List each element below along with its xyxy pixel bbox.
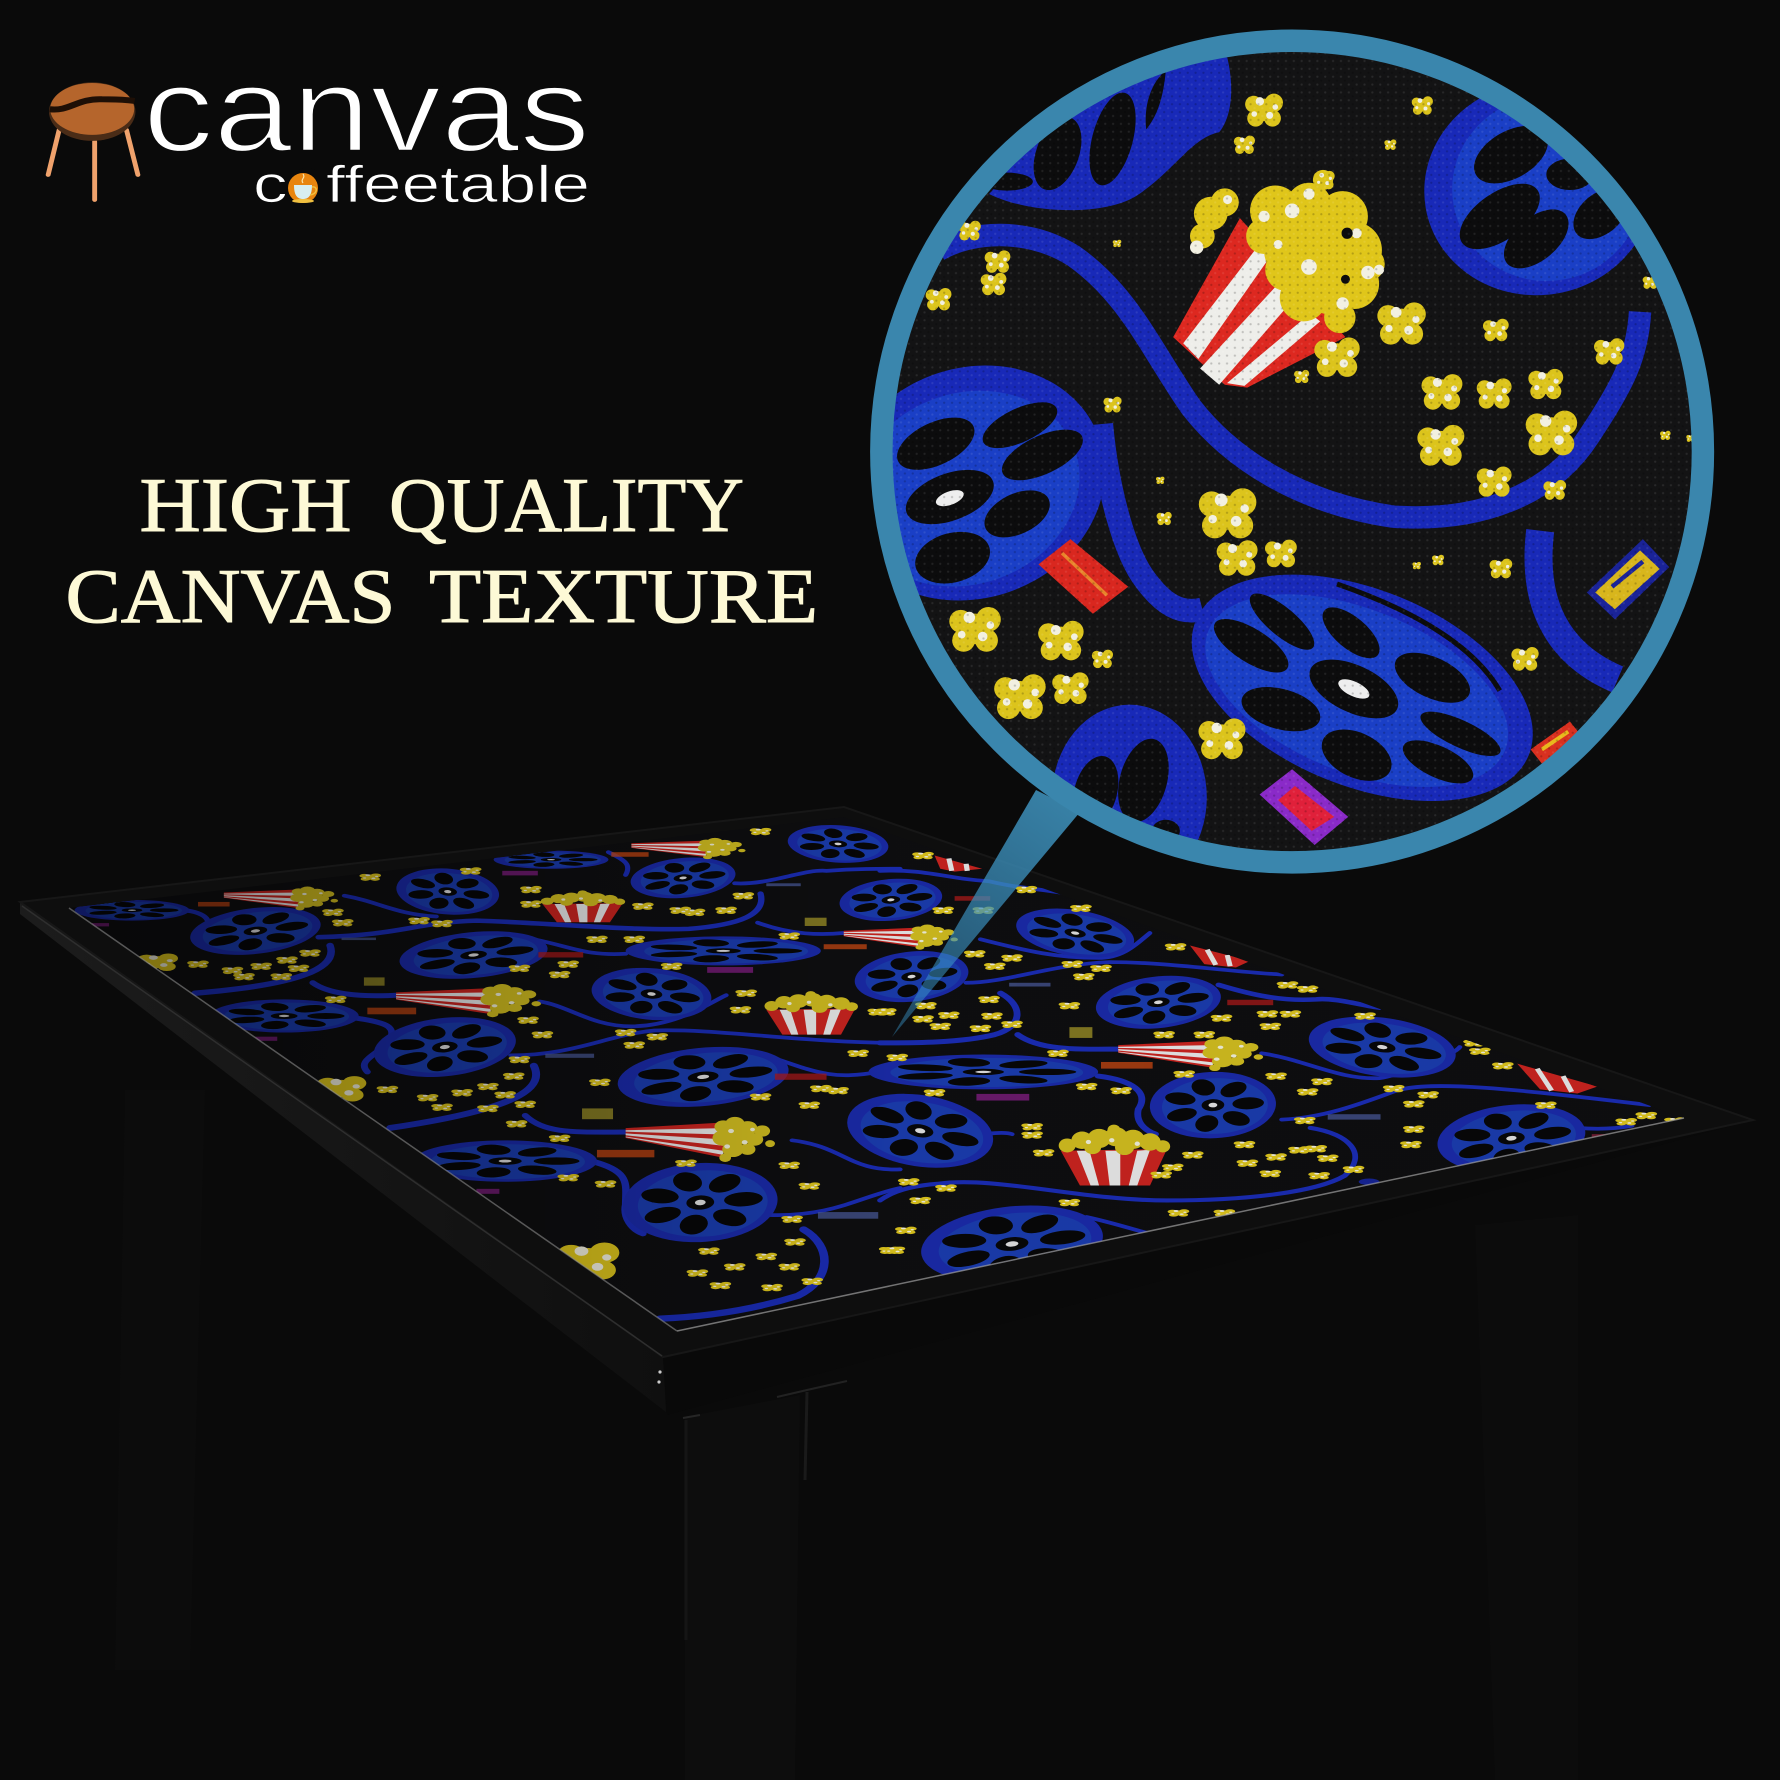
logo icon: coffee bean table (48, 82, 138, 200)
popcorn buckets left (224, 838, 958, 1162)
magnified popcorn bucket (1173, 170, 1385, 388)
magnified popcorn pieces (926, 94, 1695, 759)
film reels left (75, 822, 946, 1248)
popcorn buckets right (935, 856, 1598, 1186)
film strips right (880, 871, 1649, 1234)
magnified film strips (939, 235, 1640, 679)
scattered popcorn left (187, 828, 901, 1291)
logo tagline: coffeetable (253, 156, 590, 214)
table legs (115, 1090, 1578, 1780)
heading: high quality canvas texture: HIGH (140, 462, 352, 548)
logo (48, 43, 590, 214)
surface edge highlights (69, 908, 1684, 1331)
left half of pattern (75, 822, 958, 1319)
film reels right (835, 900, 1593, 1292)
magnified canvas texture circle (806, 41, 1703, 890)
logo wordmark: canvas (143, 43, 590, 177)
heading: high quality canvas texture: CANVAS (66, 553, 395, 639)
callout pointer (892, 790, 1080, 1037)
tickets right (955, 896, 1620, 1185)
magnified film reels (806, 48, 1671, 890)
table frame (20, 807, 1753, 1415)
tickets left (92, 852, 878, 1219)
scattered popcorn right (875, 852, 1686, 1254)
heading: high quality canvas texture: QUALITY (389, 462, 744, 548)
heading: high quality canvas texture (66, 462, 818, 639)
logo icon: coffee cup (287, 168, 327, 206)
film strips left (184, 852, 900, 1319)
magnified tickets (1038, 539, 1669, 845)
right half of pattern (835, 852, 1686, 1292)
edge popcorn left (138, 953, 619, 1279)
canvas weave overlay (882, 42, 1702, 862)
table surface with film reel and popcorn pattern (69, 817, 1686, 1331)
heading: high quality canvas texture: TEXTURE (429, 553, 818, 639)
circle ring (881, 41, 1703, 862)
